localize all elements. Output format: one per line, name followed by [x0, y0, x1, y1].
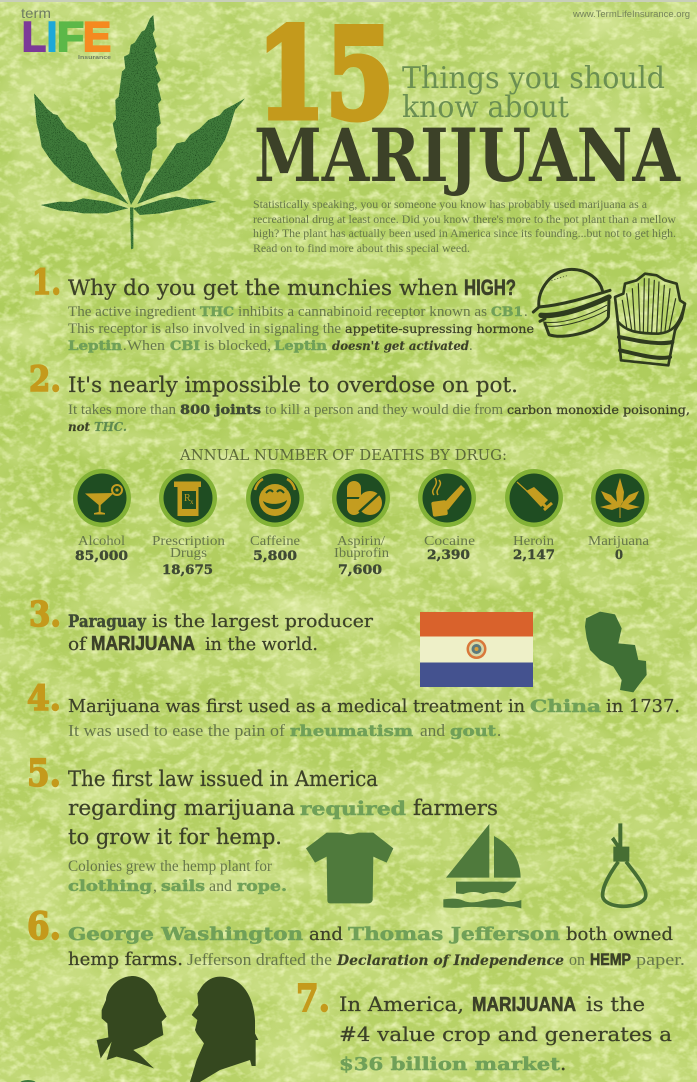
body 4: It was used to ease the pain of: [68, 721, 286, 740]
text 6: HEMP: [590, 950, 631, 969]
fact 6: [27, 904, 685, 970]
body 5: [68, 858, 287, 895]
body 1: [68, 304, 534, 354]
label: aspirin ibuprofin: Aspirin/: [337, 533, 385, 548]
number 6: 6.: [27, 904, 61, 948]
body 1: is blocked,: [204, 338, 271, 354]
heading 5: [68, 767, 498, 849]
text 6: and: [309, 924, 343, 945]
body 1: When: [127, 338, 166, 354]
heading 1: Why do you get the munchies when: [68, 276, 458, 301]
body 1: Leptin: [274, 339, 328, 354]
label: prescription drugs: Prescription: [152, 533, 225, 548]
logo: Term Life Insurance: [21, 5, 111, 61]
heading 4: Marijuana was first used as a medical treatment in: [68, 696, 525, 717]
body 1: CB1: [491, 305, 523, 320]
intro text: recreational drug at least once. Did you know there's more to the pot plant than a mellow: [253, 214, 677, 226]
body 1: The active ingredient: [68, 304, 196, 320]
icon: paraguay flag: [420, 612, 533, 687]
label: alcohol: Alcohol: [78, 533, 125, 548]
text 7: [339, 992, 672, 1075]
body 1: .: [469, 338, 473, 354]
text 7: .: [560, 1051, 566, 1075]
body 1: Leptin: [68, 339, 123, 354]
text 6: [68, 924, 685, 970]
fact 3: [29, 594, 647, 692]
next item partial mark: [20, 1080, 36, 1082]
body 4: .: [497, 721, 501, 740]
icon: noose: [603, 823, 646, 906]
heading 5: regarding marijuana: [68, 796, 295, 820]
body 2: to kill a person and they would die from: [265, 402, 504, 418]
label: prescription drugs: 18,675: [162, 563, 213, 578]
icon: pipe: [418, 469, 476, 527]
icon: cannabis leaf: [34, 15, 245, 249]
icon: burger: [533, 269, 610, 336]
label: prescription drugs: Drugs: [170, 545, 207, 560]
icon: paraguay map: [585, 612, 647, 692]
drug labels and values: [75, 533, 649, 578]
website url: www.TermLifeInsurance.org: [572, 9, 690, 19]
label: caffeine: 5,800: [253, 549, 297, 564]
body 1: This receptor is also involved in signaling the: [68, 321, 341, 337]
logo: Term Life Insurance: E: [83, 13, 111, 60]
text 7: In America,: [339, 992, 464, 1016]
body 5: clothing: [68, 877, 153, 895]
label: heroin: Heroin: [513, 533, 554, 548]
number 1: 1.: [32, 262, 61, 303]
number 2: 2.: [29, 359, 61, 400]
text 7: MARIJUANA: [472, 994, 576, 1016]
body 1: appetite-supressing hormone: [345, 321, 534, 336]
label: prescription drugs: [152, 533, 225, 578]
text 7: $36 billion market: [339, 1054, 561, 1075]
body 4: gout: [450, 722, 496, 740]
fact 4: [27, 678, 680, 740]
icon: caffeine face: [246, 469, 304, 527]
body 5: rope.: [237, 877, 287, 895]
body 1: .: [524, 304, 528, 320]
chart heading: annual deaths: ANNUAL NUMBER OF DEATHS BY DRUG:: [179, 446, 507, 464]
body 2: THC.: [94, 419, 127, 434]
label: caffeine: Caffeine: [250, 533, 300, 548]
silhouette: Thomas Jefferson: [190, 977, 258, 1082]
body 4: rheumatism: [290, 722, 413, 740]
intro text: Statistically speaking, you or someone you know has probably used marijuana as a: [253, 199, 647, 211]
intro text: [253, 199, 677, 255]
text 3: [68, 611, 373, 655]
body 4: [68, 721, 501, 740]
text 3: of: [68, 634, 87, 655]
text 7: #4 value crop and generates a: [339, 1022, 672, 1046]
text 3: MARIJUANA: [91, 633, 195, 655]
text 6: hemp farms.: [68, 949, 183, 970]
body 2: carbon monoxide poisoning,: [507, 402, 690, 417]
icon: t-shirt: [306, 833, 393, 903]
body 1: .: [123, 338, 127, 354]
label: cocaine: Cocaine: [424, 533, 475, 548]
fact 1: [32, 262, 685, 365]
number 4: 4.: [27, 678, 61, 719]
logo: Term Life Insurance: I: [47, 13, 57, 60]
silhouette: George Washington: [97, 976, 167, 1068]
text 6: George Washington: [68, 925, 303, 945]
body 2: It takes more than: [68, 402, 177, 418]
logo: Term Life Insurance: term: [21, 5, 51, 21]
heading 5: required: [300, 798, 406, 820]
text 6: on: [569, 950, 585, 969]
icon: prescription bottle: x: [190, 498, 194, 506]
body 2: not: [68, 419, 90, 434]
heading 1: HIGH?: [464, 275, 516, 300]
fact 5: [27, 751, 646, 908]
text 6: paper.: [636, 950, 685, 969]
logo: Term Life Insurance: F: [57, 13, 84, 60]
heading 2: It's nearly impossible to overdose on pot.: [68, 373, 518, 398]
drug death icons row: [73, 469, 649, 527]
label: cocaine: 2,390: [427, 548, 470, 563]
title: 15: [257, 2, 394, 148]
intro text: high? The plant has actually been used in America since its founding...but not to get high.: [253, 228, 676, 240]
body 1: inhibits a cannabinoid receptor known as: [238, 304, 487, 320]
text 3: in the world.: [205, 634, 318, 655]
heading 5: farmers: [413, 796, 498, 820]
title: Things you should: [402, 61, 665, 96]
title: [254, 2, 681, 199]
text 6: both owned: [566, 924, 673, 945]
text 3: is the largest producer: [152, 611, 373, 632]
label: aspirin ibuprofin: [334, 533, 389, 578]
title: know about: [402, 90, 569, 125]
text 6: Declaration of Independence: [336, 953, 564, 969]
icon: syringe: [505, 469, 563, 527]
heading 4: in 1737.: [606, 696, 680, 717]
logo: Term Life Insurance: L: [22, 13, 46, 60]
body 1: doesn't get activated: [332, 338, 469, 353]
body 1: THC: [200, 305, 234, 320]
label: heroin: 2,147: [513, 548, 555, 563]
label: alcohol: [75, 533, 128, 564]
icon: sailboat: [443, 824, 521, 908]
heading 5: to grow it for hemp.: [68, 825, 282, 849]
label: aspirin ibuprofin: 7,600: [338, 563, 382, 578]
text 3: Paraguay: [68, 612, 147, 632]
body 5: ,: [153, 878, 157, 895]
logo: Term Life Insurance: Insurance: [78, 55, 111, 61]
icon: fries: [615, 274, 685, 365]
icon: pills: [332, 469, 390, 527]
icon: alcohol: [73, 469, 131, 527]
intro text: Read on to find more about this special weed.: [253, 243, 470, 255]
label: marijuana: 0: [615, 548, 623, 563]
label: heroin: [513, 533, 555, 563]
fact 2: [29, 359, 690, 434]
fact 7: [296, 976, 672, 1075]
heading 4: China: [530, 697, 601, 717]
text 7: is the: [586, 992, 645, 1016]
text 6: Jefferson drafted the: [187, 950, 332, 969]
heading 5: The first law issued in America: [68, 767, 378, 791]
body 2: 800 joints: [180, 403, 261, 418]
icon: prescription bottle: R: [184, 493, 191, 504]
body 5: Colonies grew the hemp plant for: [68, 858, 273, 875]
number 7: 7.: [296, 976, 330, 1020]
number 5: 5.: [27, 751, 61, 795]
text 6: Thomas Jefferson: [348, 925, 560, 945]
label: aspirin ibuprofin: Ibuprofin: [334, 545, 389, 560]
body 4: and: [420, 721, 446, 740]
body 1: CBI: [170, 339, 200, 354]
icon: prescription bottle: [159, 469, 217, 527]
label: marijuana: Marijuana: [588, 533, 649, 548]
body 5: and: [209, 878, 232, 895]
label: marijuana: [588, 533, 649, 563]
icon: marijuana leaf: [591, 469, 649, 527]
label: cocaine: [424, 533, 475, 563]
label: alcohol: 85,000: [75, 549, 128, 564]
body 5: sails: [161, 877, 205, 895]
label: caffeine: [250, 533, 300, 564]
body 2: [68, 402, 690, 434]
number 3: 3.: [29, 594, 61, 635]
